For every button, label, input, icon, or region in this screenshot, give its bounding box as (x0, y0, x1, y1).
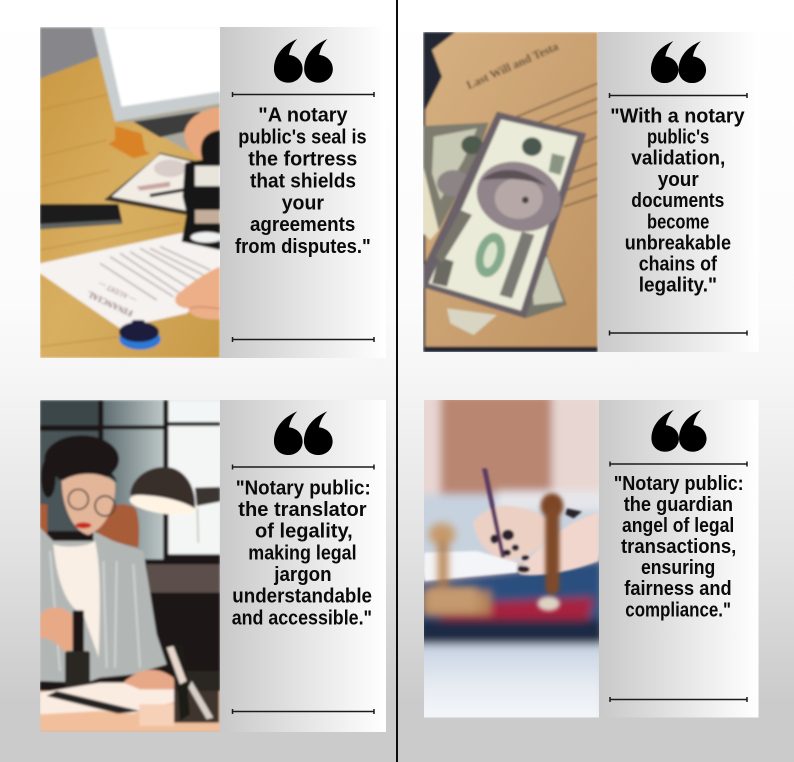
quote text 1: public's seal is (238, 127, 367, 149)
top rule (232, 464, 374, 470)
quote text 3: jargon (273, 564, 332, 586)
quote text 4: angel of legal (622, 515, 734, 537)
icon: quotation marks (274, 39, 333, 83)
quote text 4: fairness and (624, 578, 732, 600)
quote text 2: documents (631, 190, 724, 212)
photo: last will and dollar bills: Last Will and Testa (464, 39, 560, 92)
photo: notary stamping a financial audit document: — AUDIT — (96, 279, 138, 305)
quote text 1: agreements (250, 214, 355, 236)
quote text 1: the fortress (248, 148, 357, 170)
quote text 3: of legality, (255, 521, 353, 543)
quote text 3: making legal (248, 542, 357, 564)
quote text 3: and accessible." (232, 607, 372, 629)
icon: quotation marks (274, 411, 333, 455)
quote text 2: legality." (639, 275, 717, 297)
text panel 1 (220, 27, 386, 358)
quote text 2: unbreakable (625, 232, 731, 254)
quote text 1 (235, 105, 371, 258)
top rule (610, 462, 747, 466)
quote text 2: public's (647, 126, 709, 148)
panel: quote card 3 (40, 400, 386, 732)
quote text 4: "Notary public: (614, 473, 744, 495)
quote text 4: ensuring (641, 557, 715, 579)
quote text 1: from disputes." (235, 236, 371, 258)
quote text 3: understandable (232, 586, 372, 608)
bottom rule (232, 709, 374, 714)
bottom rule (610, 697, 747, 702)
quote text 3 (232, 477, 372, 629)
quote text 3: the translator (238, 499, 367, 521)
quote text 1: "A notary (258, 105, 348, 127)
panel: quote card 1 (40, 27, 386, 358)
photo: notary stamping a financial audit document: FINANCIAL (85, 289, 134, 319)
quote text 2: your (658, 169, 699, 191)
quote text 2: become (647, 211, 709, 233)
vertical divider (396, 0, 398, 762)
top rule (610, 93, 747, 98)
text panel 2 (598, 32, 758, 352)
quote text 4 (614, 473, 744, 621)
photo: last will and dollar bills (423, 32, 598, 352)
text panel 4 (599, 400, 758, 718)
quote text 3: "Notary public: (236, 477, 371, 499)
photo: notary stamping a financial audit document (40, 27, 223, 358)
quote text 4: the guardian (624, 494, 733, 516)
quote text 2: "With a notary (610, 105, 745, 127)
icon: quotation marks (651, 41, 706, 83)
quote text 2: validation, (631, 148, 725, 170)
quote text 2: chains of (639, 254, 717, 276)
top rule (232, 92, 374, 97)
photo: woman using a stamp at her desk (40, 400, 220, 732)
quote text 4: compliance." (625, 599, 731, 621)
photo: hand signing beside wax seal stamps (417, 394, 604, 724)
quote text 4: transactions, (621, 536, 736, 558)
icon: quotation marks (651, 410, 707, 452)
quote text 1: your (282, 192, 324, 214)
panel: quote card 2 (423, 32, 758, 352)
bottom rule (610, 330, 747, 336)
bottom rule (232, 337, 374, 342)
quote text 1: that shields (250, 170, 356, 192)
text panel 3 (220, 400, 386, 732)
panel: quote card 4 (417, 394, 758, 724)
quote text 2 (610, 105, 745, 297)
